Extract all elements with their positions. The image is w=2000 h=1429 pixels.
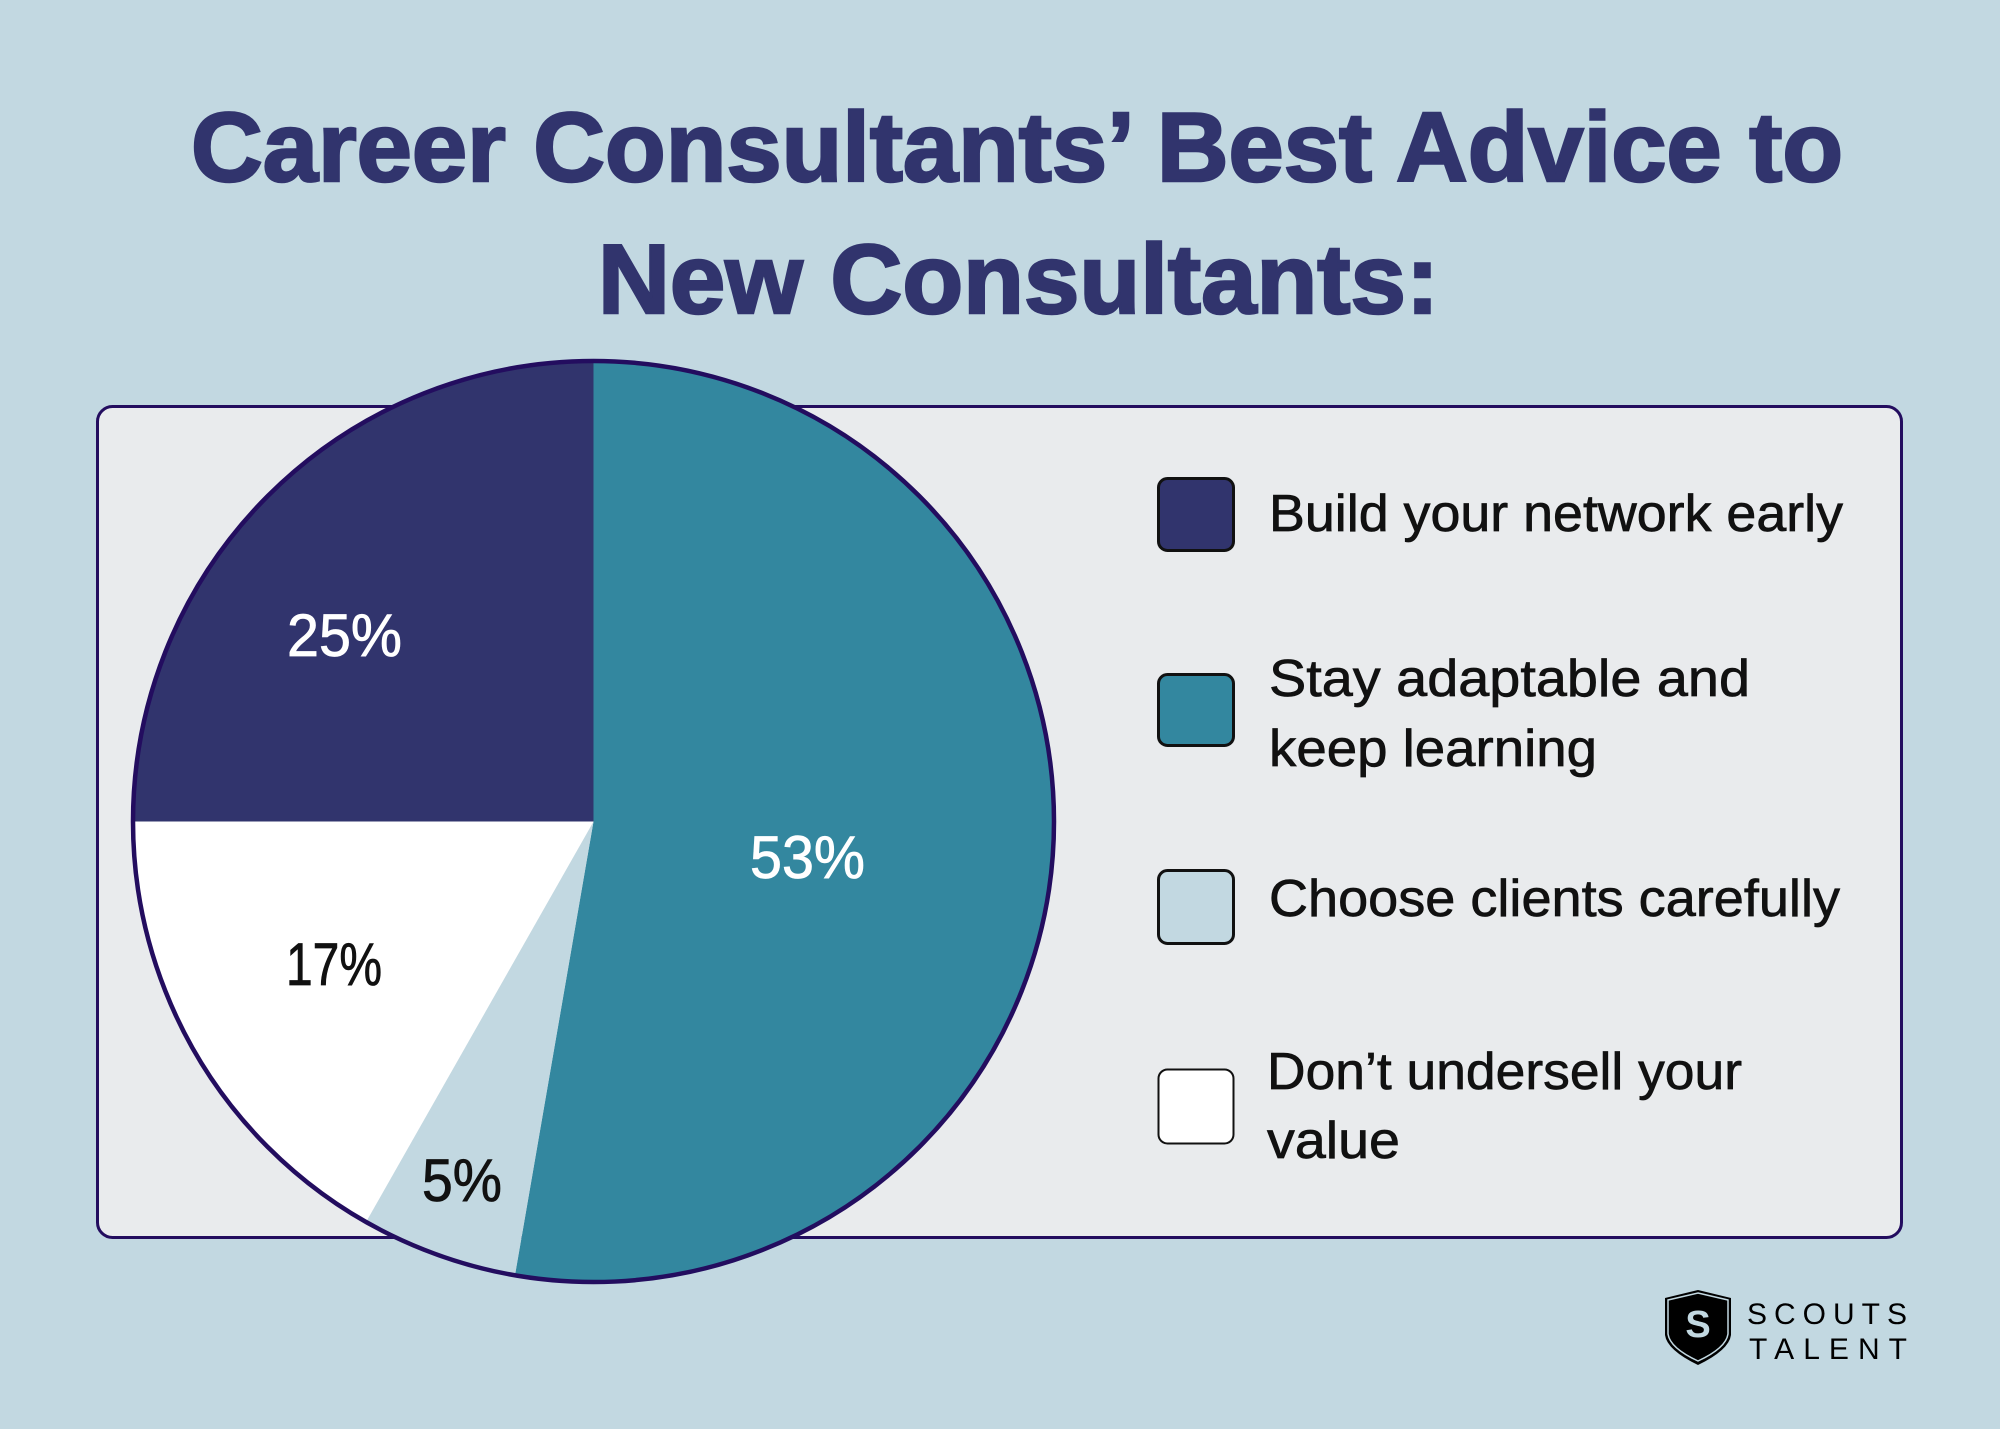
legend text: build your network early: Build your network early (1269, 485, 1843, 543)
label: 5%: 5% (422, 1147, 502, 1214)
icon: shield (1665, 1290, 1731, 1365)
pie chart (133, 361, 1054, 1282)
wordmark: SCOUTS (1747, 1298, 1907, 1331)
logo: scouts talent (1665, 1290, 1907, 1366)
label: 25%: 25% (287, 602, 402, 669)
label: 17%: 17% (286, 931, 382, 998)
legend text: don't undersell your value: Don’t undersell your (1267, 1043, 1742, 1101)
legend text: don't undersell your value: value (1267, 1112, 1400, 1170)
wordmark (1747, 1298, 1907, 1366)
legend swatch: teal (1158, 674, 1234, 746)
pie outline (133, 361, 1054, 1282)
title: Career Consultants’ Best Advice to (191, 92, 1843, 202)
slice: 5% choose clients (366, 822, 594, 1275)
legend text: don't undersell your value (1267, 1043, 1742, 1170)
legend swatch: white (1158, 1070, 1234, 1144)
label: 53%: 53% (750, 824, 865, 891)
panel: legend card (98, 406, 1902, 1238)
title: New Consultants: (598, 224, 1439, 334)
slice: 53% stay adaptable (515, 361, 1054, 1282)
legend text: stay adaptable and keep learning (1269, 650, 1750, 778)
icon: shield: S (1685, 1304, 1711, 1346)
slice: 25% build network (133, 361, 594, 822)
slice: 17% don't undersell (133, 822, 594, 1222)
legend text: stay adaptable and keep learning: keep learning (1269, 720, 1597, 778)
legend text: stay adaptable and keep learning: Stay adaptable and (1269, 650, 1750, 708)
legend swatch: navy (1158, 478, 1234, 550)
legend (1158, 478, 1843, 1170)
legend text: choose clients carefully: Choose clients carefully (1269, 870, 1840, 928)
legend swatch: light blue (1158, 870, 1234, 944)
wordmark: TALENT (1749, 1333, 1907, 1366)
title (191, 92, 1843, 334)
